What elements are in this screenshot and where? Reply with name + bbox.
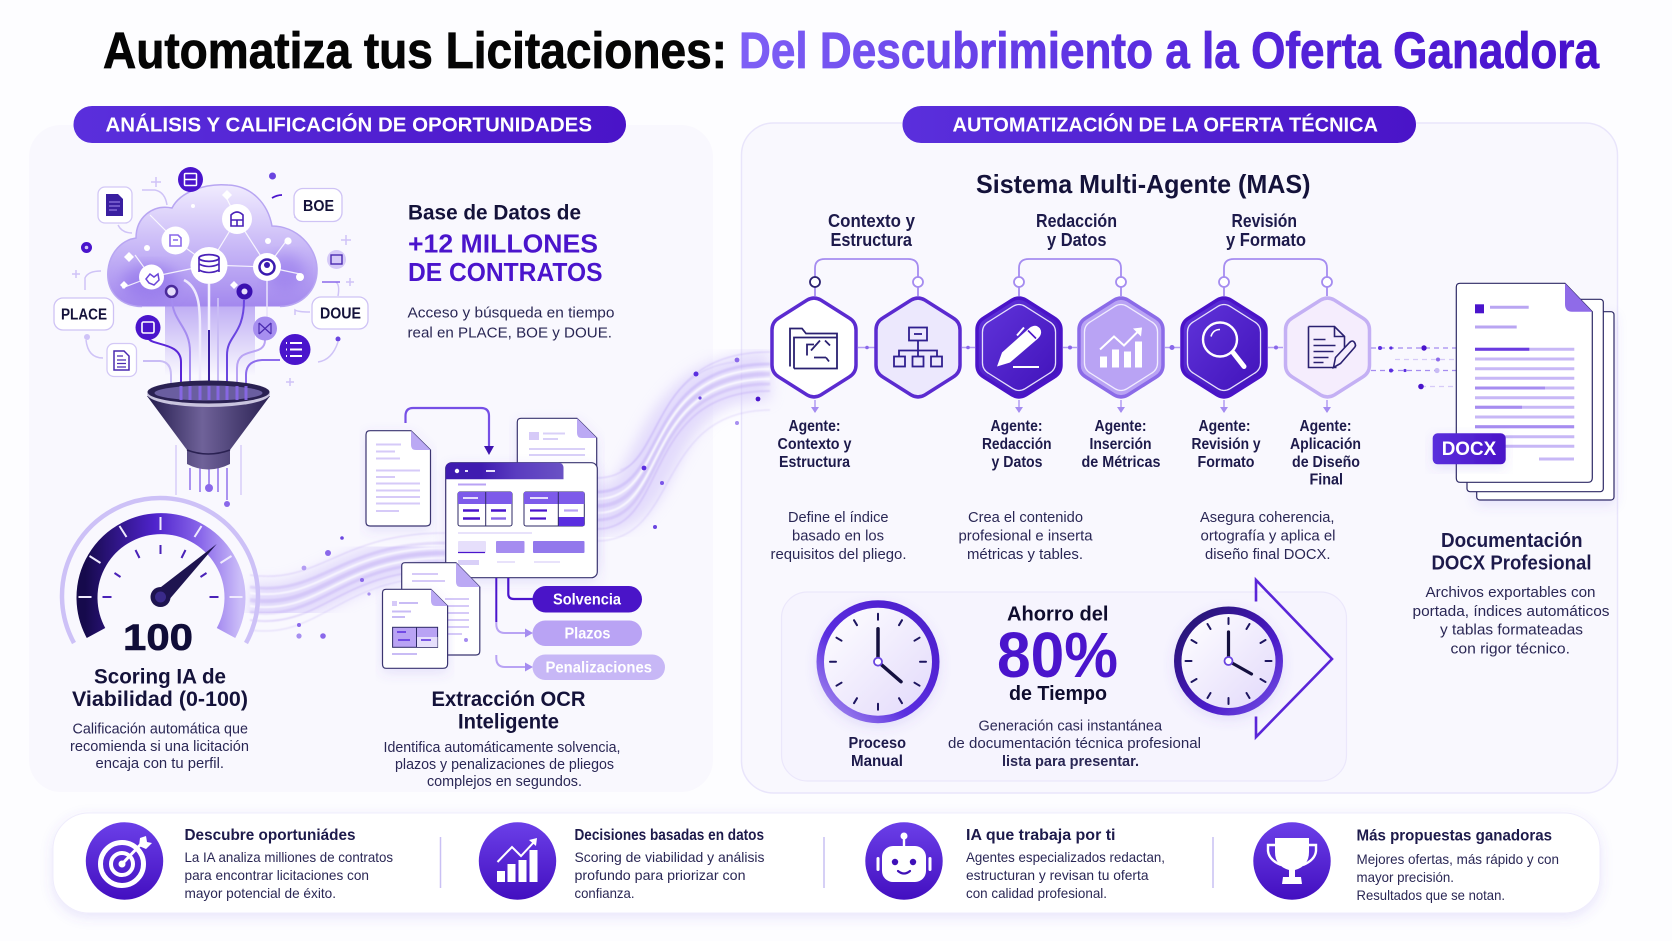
- badge: DOCX: DOCX: [1442, 439, 1497, 460]
- label: proceso manual: Manual: [851, 753, 903, 770]
- label: proceso manual: Proceso: [848, 735, 906, 752]
- icon: folder: [790, 328, 837, 368]
- group headings: y Formato: [1226, 230, 1306, 250]
- panel: análisis y calificación: [29, 125, 713, 792]
- text: extracción OCR: Inteligente: [458, 710, 559, 734]
- gauge needle: [156, 544, 217, 603]
- connector pipes fade: [165, 306, 255, 376]
- agent labels: Inserción: [1090, 436, 1152, 453]
- section pill: automatización: [902, 106, 1416, 143]
- icon: robot: [865, 822, 943, 900]
- benefit: más propuestas ganadoras: [1253, 822, 1559, 903]
- icon: chart: [479, 822, 556, 900]
- benefit: más propuestas ganadoras: Resultados que se notan.: [1356, 887, 1505, 903]
- agent hexagon: redacción: [977, 298, 1061, 397]
- agent labels: Revisión y: [1192, 436, 1261, 453]
- savings description: Generación casi instantánea: [978, 718, 1163, 734]
- savings figure: [997, 604, 1118, 705]
- agent labels: Agente:: [788, 418, 840, 435]
- savings figure: 80%: [997, 619, 1118, 691]
- benefit: IA que trabaja por ti: IA que trabaja por ti: [966, 827, 1116, 844]
- text: documentación DOCX: [1412, 530, 1610, 658]
- agent labels: [778, 418, 1361, 488]
- heading: sistema multi-agente: Sistema Multi-Agente (MAS): [976, 169, 1310, 199]
- title: Automatiza tus Licitaciones:: [103, 22, 727, 79]
- document: left: [366, 431, 430, 526]
- badge: DOCX: [1433, 433, 1506, 464]
- agent hexagon: contexto y estructura: [772, 298, 856, 397]
- benefit: descubre oportunidades: mayor potencial de éxito.: [184, 885, 336, 901]
- text: documentación DOCX: DOCX Profesional: [1432, 552, 1592, 574]
- result pill: plazos: Plazos: [564, 626, 611, 642]
- result pill: solvencia: [532, 586, 642, 612]
- cloud: [108, 185, 317, 306]
- document stack: lower: [382, 563, 480, 668]
- text: base de datos: DE CONTRATOS: [408, 257, 602, 287]
- text: extracción OCR: [384, 688, 620, 790]
- result pill: solvencia: Solvencia: [553, 592, 621, 608]
- benefit: decisiones basadas en datos: [479, 822, 764, 901]
- decorative connectors around the cloud: [72, 177, 354, 386]
- window: extraction form: [446, 463, 597, 578]
- result pill: plazos: [532, 620, 642, 646]
- result pill: penalizaciones: [532, 654, 665, 680]
- agent descriptions: [770, 509, 1336, 563]
- agent descriptions: Define el índice: [788, 509, 888, 526]
- agent descriptions: Crea el contenido: [968, 509, 1083, 526]
- agent descriptions: Asegura coherencia,: [1200, 509, 1334, 526]
- connectors to result pills: [496, 578, 533, 672]
- source tag: BOE: [294, 188, 342, 222]
- table two: [524, 492, 584, 526]
- benefit: descubre oportunidades: [86, 822, 393, 901]
- text: scoring IA: [70, 666, 249, 772]
- text: documentación DOCX: y tablas formateadas: [1440, 622, 1583, 638]
- icon: magnifier: [1203, 322, 1244, 366]
- benefit: más propuestas ganadoras: Mejores ofertas, más rápido y con: [1356, 851, 1559, 867]
- group headings: Revisión: [1232, 211, 1297, 231]
- agent labels: Agente:: [1300, 418, 1352, 435]
- document stack: DOCX: [1433, 283, 1614, 500]
- icon: manual clock: [816, 600, 940, 723]
- connectors between hexagons: [811, 345, 1331, 413]
- text: scoring IA: Calificación automática que: [72, 720, 248, 738]
- agent hexagon: revisión: [1182, 298, 1266, 397]
- benefit: IA que trabaja por ti: estructuran y revisan tu oferta: [966, 867, 1149, 883]
- benefit: decisiones basadas en datos: confianza.: [574, 885, 634, 901]
- cloud data sources illustration: [54, 167, 368, 400]
- text: extracción OCR: plazos y penalizaciones de pliegos: [395, 756, 614, 773]
- text: base de datos: +12 MILLONES: [408, 228, 598, 258]
- benefit: descubre oportunidades: para encontrar licitaciones con: [184, 867, 369, 883]
- agent labels: y Datos: [992, 454, 1042, 471]
- section pill: análisis: [74, 106, 626, 143]
- benefit: decisiones basadas en datos: Scoring de viabilidad y análisis: [574, 849, 764, 865]
- gauge: scoring 100: 100: [123, 617, 193, 658]
- flowing data wave: gauge to OCR: [250, 533, 445, 639]
- source tag: DOUE: [312, 297, 368, 329]
- agent labels: Final: [1310, 472, 1343, 488]
- bottom benefits bar: [53, 813, 1600, 913]
- icon: circular nodes: [81, 167, 346, 365]
- text: scoring IA: recomienda si una licitación: [70, 738, 249, 755]
- text: scoring IA: Viabilidad (0-100): [72, 688, 248, 711]
- agent descriptions: ortografía y aplica el: [1200, 528, 1336, 544]
- agent labels: Agente:: [1094, 418, 1146, 435]
- text: documentación DOCX: portada, índices automáticos: [1412, 603, 1610, 620]
- source tag: PLACE: [54, 298, 114, 330]
- icon: target: [86, 822, 163, 900]
- benefit: IA que trabaja por ti: [865, 822, 1165, 901]
- cloud nodes: [190, 247, 228, 284]
- title: [103, 22, 1600, 79]
- node connectors to funnel: [143, 280, 280, 400]
- benefit: más propuestas ganadoras: mayor precisión.: [1356, 869, 1454, 885]
- panel: automatización de la oferta: [742, 123, 1618, 793]
- gauge: scoring 100: [62, 498, 258, 658]
- savings description: lista para presentar.: [1002, 753, 1139, 770]
- text: extracción OCR: Extracción OCR: [432, 688, 586, 711]
- agent descriptions: requisitos del pliego.: [770, 546, 906, 563]
- savings figure: Ahorro del: [1007, 604, 1108, 626]
- agent labels: Agente:: [1198, 418, 1250, 435]
- icon: document cards: [98, 187, 136, 376]
- label: proceso manual: [848, 735, 906, 770]
- agent descriptions: profesional e inserta: [958, 528, 1093, 544]
- arrow: document to window: [406, 408, 494, 455]
- text: documentación DOCX: Documentación: [1441, 530, 1582, 552]
- agent hexagon: estructura: [876, 298, 960, 397]
- agent descriptions: basado en los: [792, 528, 884, 544]
- result pill: penalizaciones: Penalizaciones: [546, 660, 652, 676]
- connector lines to document stack: [1371, 345, 1457, 389]
- benefit: descubre oportunidades: Descubre oportuniádes: [184, 827, 356, 844]
- benefit: decisiones basadas en datos: profundo para priorizar con: [574, 867, 746, 883]
- text: base de datos: Base de Datos de: [408, 202, 581, 224]
- text: scoring IA: Scoring IA de: [94, 666, 226, 688]
- group brackets: [810, 259, 1332, 296]
- flowing data wave: OCR to agents: [597, 352, 770, 541]
- icon: automated clock: [1174, 606, 1283, 716]
- agent labels: Agente:: [990, 418, 1042, 435]
- agent descriptions: diseño final DOCX.: [1205, 546, 1330, 563]
- section pill: análisis: ANÁLISIS Y CALIFICACIÓN DE OPORTUNIDADES: [106, 112, 592, 136]
- icon: fast arrow: [1256, 580, 1332, 737]
- savings description: de documentación técnica profesional: [948, 735, 1201, 752]
- agent labels: de Diseño: [1292, 454, 1360, 471]
- text: base de datos: Acceso y búsqueda en tiempo: [408, 304, 614, 322]
- text: extracción OCR: Identifica automáticamente solvencia,: [384, 739, 620, 756]
- table one: [458, 492, 512, 526]
- OCR extraction illustration: [366, 408, 665, 680]
- text: base de datos: [408, 202, 614, 342]
- group headings: y Datos: [1047, 230, 1106, 250]
- agent hexagon: métricas: [1079, 298, 1163, 397]
- text: documentación DOCX: con rigor técnico.: [1450, 640, 1570, 658]
- group headings: [828, 211, 1306, 250]
- agent labels: Contexto y: [778, 436, 852, 453]
- agent labels: de Métricas: [1082, 454, 1160, 471]
- agent descriptions: métricas y tables.: [967, 546, 1083, 563]
- icon: rising bars: [1100, 328, 1142, 368]
- source tag: DOUE: DOUE: [320, 306, 361, 322]
- icon: funnel: [147, 380, 270, 507]
- savings figure: de Tiempo: [1009, 683, 1107, 705]
- section pill: automatización: AUTOMATIZACIÓN DE LA OFERTA TÉCNICA: [952, 112, 1378, 136]
- source tag: BOE: BOE: [303, 198, 334, 215]
- benefit: IA que trabaja por ti: Agentes especializados redactan,: [966, 849, 1165, 865]
- benefit: IA que trabaja por ti: con calidad profesional.: [966, 885, 1107, 901]
- savings description: [948, 718, 1201, 770]
- text: scoring IA: encaja con tu perfil.: [96, 755, 224, 772]
- text: extracción OCR: complejos en segundos.: [427, 773, 582, 790]
- panel: ahorro de tiempo: [782, 580, 1346, 781]
- group headings: Estructura: [830, 230, 913, 250]
- agent labels: Estructura: [779, 454, 850, 471]
- agent labels: Redacción: [982, 436, 1052, 453]
- benefit: más propuestas ganadoras: Más propuestas ganadoras: [1356, 828, 1552, 844]
- text: documentación DOCX: Archivos exportables con: [1426, 584, 1596, 601]
- agent labels: Formato: [1198, 454, 1254, 471]
- icon: org chart: [894, 328, 942, 366]
- benefit: decisiones basadas en datos: Decisiones basadas en datos: [574, 827, 764, 844]
- benefit: descubre oportunidades: La IA analiza milliones de contratos: [184, 849, 393, 865]
- group headings: Contexto y: [828, 211, 915, 231]
- document: right: [517, 418, 597, 560]
- source tag: PLACE: PLACE: [61, 306, 107, 324]
- icon: document with pen: [1308, 326, 1356, 368]
- text: base de datos: real en PLACE, BOE y DOUE.: [408, 324, 612, 342]
- icon: pencil: [997, 326, 1041, 367]
- agent labels: Aplicación: [1290, 436, 1361, 453]
- agent hexagon: diseño final: [1286, 298, 1370, 397]
- icon: trophy: [1253, 822, 1331, 900]
- gauge ticks: [78, 517, 242, 597]
- group headings: Redacción: [1036, 211, 1117, 231]
